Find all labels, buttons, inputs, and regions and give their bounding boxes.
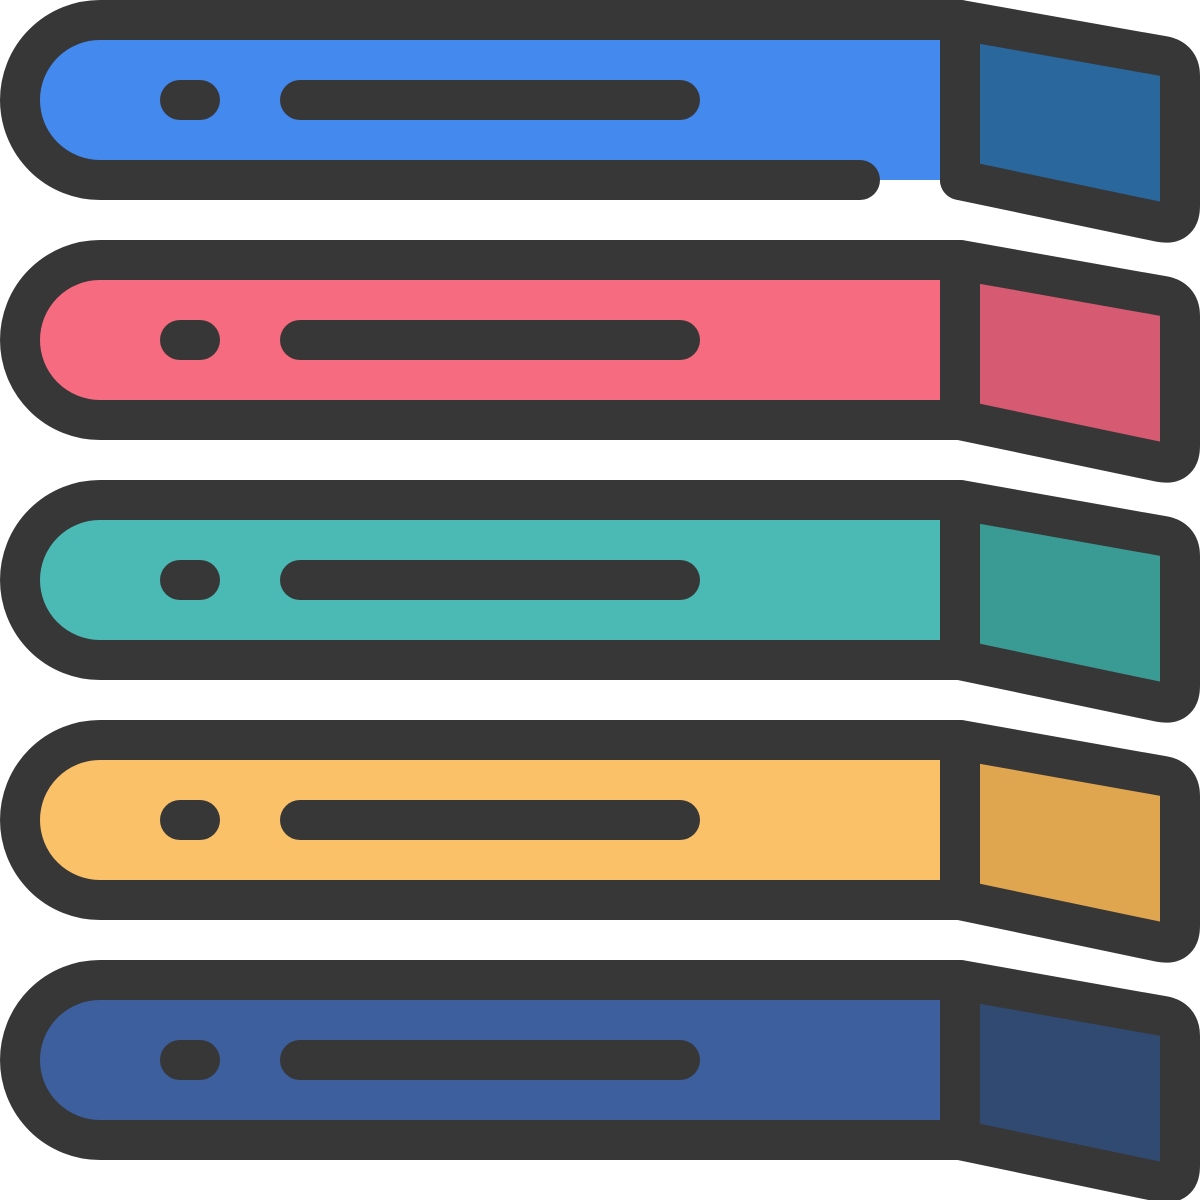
- row 1: blue: [20, 20, 1180, 223]
- row 3: teal: [20, 500, 1180, 703]
- row 5: navy: [20, 980, 1180, 1183]
- row 2: pink: [20, 260, 1180, 463]
- row 4: yellow: [20, 740, 1180, 943]
